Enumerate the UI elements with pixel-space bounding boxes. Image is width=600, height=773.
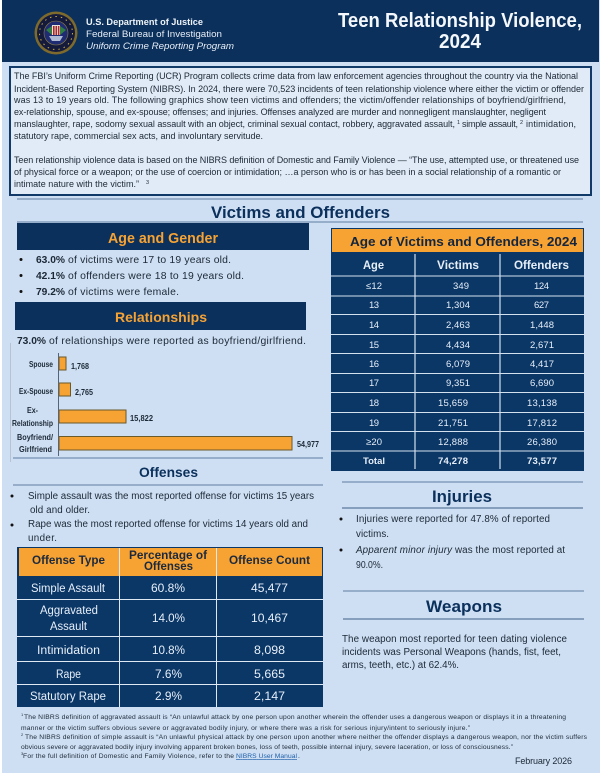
age table rows — [363, 281, 557, 467]
age table header: Offenders — [514, 258, 569, 272]
header band — [2, 0, 599, 62]
offense table rows: 10,467 — [251, 613, 288, 625]
age table rows: 9,351 — [446, 378, 470, 389]
age table rows: 19 — [369, 418, 379, 429]
age table rows: 12,888 — [438, 437, 468, 448]
weapons text — [342, 634, 568, 671]
age table rows: 18 — [369, 398, 379, 409]
offense table header: Percentage of — [129, 550, 207, 562]
footnotes — [21, 712, 588, 760]
offense table header: Offense Count — [229, 555, 310, 567]
age table rows: 15,659 — [438, 398, 468, 409]
bar chart: relationships: Ex-Spouse — [19, 387, 53, 396]
injuries bullets: 90.0%. — [356, 560, 383, 571]
bar chart: relationships: Spouse — [29, 360, 53, 369]
offense table rows: 8,098 — [254, 645, 285, 657]
footnotes: The NIBRS definition of aggravated assault is “An unlawful attack by one person upon another wherein the offender uses a dangerous weapon or displays it in a threatening — [24, 714, 566, 721]
injuries bullets — [340, 514, 565, 571]
age table rows: 21,751 — [438, 418, 468, 429]
offense table rows: 2.9% — [155, 691, 182, 703]
offense table rows: Rape — [56, 669, 81, 681]
intro text box: was 13 to 19 years old. The following graphics show teen victims and offenders; the victim/offender relationships of boyfriend/girlfriend, — [13, 95, 566, 105]
intro text box: 2 — [520, 120, 523, 126]
heading: Injuries: Injuries — [432, 487, 492, 506]
offense table header: Offense Type — [32, 555, 105, 567]
offense table rows: 2,147 — [254, 691, 285, 703]
weapons text: incidents was Personal Weapons (hands, fist, feet, — [342, 647, 561, 658]
injuries bullets: was the most reported at — [454, 545, 565, 556]
bar chart: relationships: Ex- — [27, 406, 38, 415]
age table rows: 4,434 — [446, 340, 470, 351]
intro text box: Teen relationship violence data is based on the NIBRS definition of Domestic and Family Violence — “The use, attempted use, or threatened use — [14, 155, 579, 165]
age table rows: 2,671 — [530, 340, 554, 351]
offense table rows: Intimidation — [37, 645, 100, 657]
intro text box — [10, 67, 591, 195]
offense table rows: 14.0% — [152, 613, 185, 625]
age table rows: 73,577 — [527, 456, 557, 467]
title — [338, 9, 582, 53]
footnotes: NIBRS User Manual — [236, 753, 298, 760]
offense table header: Offenses — [144, 561, 193, 573]
age table header: Victims — [437, 258, 479, 272]
offense table rows: Statutory Rape — [30, 691, 106, 703]
offense table rows: Assault — [50, 621, 88, 633]
age table rows: 74,278 — [438, 456, 468, 467]
age table rows: 15 — [369, 340, 379, 351]
age and gender bullets: 79.2% — [36, 287, 65, 298]
age table rows: 26,380 — [527, 437, 557, 448]
offense table rows: 7.6% — [155, 669, 182, 681]
footnotes: 1 — [21, 712, 24, 717]
intro text box: The FBI’s Uniform Crime Reporting (UCR) Program collects crime data from law enforcement agencies throughout the country via the National — [14, 71, 578, 81]
relationships statement: of relationships were reported as boyfriend/girlfriend. — [49, 336, 306, 347]
intro text box: 1 — [457, 120, 460, 126]
weapons text: arms, teeth, etc.) at 62.4%. — [342, 660, 459, 671]
age table rows: 2,463 — [446, 320, 470, 331]
age table rows: 4,417 — [530, 359, 554, 370]
offense table rows: 60.8% — [151, 583, 185, 595]
age table rows: 1,304 — [446, 300, 470, 311]
intro text box: ex-relationship, spouse, and ex-spouse; offenses; and injuries. Offenses analyzed are murder and nonnegligent manslaughter, negligent — [14, 107, 546, 117]
heading: Victims and Offenders: Victims and Offenders — [211, 203, 390, 222]
injuries bullets: Apparent minor injury — [355, 545, 453, 556]
offense table rows: 45,477 — [251, 583, 288, 595]
footnotes: 2 — [21, 732, 24, 737]
offense table rows: 5,665 — [254, 669, 285, 681]
panel: relationships heading — [15, 302, 306, 330]
injuries bullets: Injuries were reported for 47.8% of reported — [356, 514, 550, 525]
age table rows: 627 — [534, 300, 549, 311]
bar chart: relationships: Relationship — [12, 419, 53, 428]
publication date: February 2026 — [515, 756, 572, 766]
bar chart: relationships: Boyfriend/ — [17, 433, 54, 442]
offenses bullets: under. — [28, 533, 57, 544]
intro text box: Incident-Based Reporting System (NIBRS). In 2024, there were 70,523 incidents of teen relationship violence where either the victim or offender — [14, 84, 584, 94]
offenses bullets: old and older. — [30, 505, 90, 516]
age table rows: ≥20 — [366, 437, 382, 448]
bar chart: relationships — [10, 343, 319, 462]
bar chart: relationships: 1,768 — [71, 362, 89, 371]
age and gender bullets: 63.0% — [36, 255, 65, 266]
heading: Weapons: Weapons — [426, 597, 502, 616]
age and gender bullets: of victims were 17 to 19 years old. — [68, 255, 231, 266]
age table rows: 16 — [369, 359, 379, 370]
intro text box: 3 — [146, 180, 149, 186]
bar chart: relationships: 15,822 — [130, 414, 154, 423]
agency text: Federal Bureau of Investigation — [86, 29, 222, 40]
footnotes: The NIBRS definition of simple assault is “An unlawful physical attack by one person upon another where neither the offender displays a dangerous weapon, nor the victim suffers — [25, 734, 588, 741]
age table rows: 1,448 — [530, 320, 554, 331]
offense table rows: Aggravated — [40, 605, 98, 617]
table: age of victims and offenders — [331, 228, 584, 471]
age and gender bullets: 42.1% — [36, 271, 65, 282]
offenses bullets: Rape was the most reported offense for victims 14 years old and — [28, 519, 308, 530]
age table rows: 349 — [453, 281, 469, 292]
intro text box: simple assault, — [462, 119, 518, 129]
age table title: Age of Victims and Offenders, 2024 — [350, 234, 578, 249]
age and gender bullets: of victims were female. — [68, 287, 179, 298]
panel: relationships heading: Relationships — [115, 309, 207, 325]
offenses bullets — [10, 491, 314, 544]
icon: FBI seal — [34, 12, 78, 54]
agency text — [86, 17, 234, 52]
offense table rows: Simple Assault — [31, 583, 106, 595]
bar chart: relationships: Girlfriend — [19, 445, 52, 454]
age table rows: 13,138 — [527, 398, 557, 409]
footnotes: For the full definition of Domestic and Family Violence, refer to the — [23, 753, 234, 760]
bar chart: relationships: 54,977 — [297, 440, 319, 449]
intro text box: intimate nature with the victim.” — [14, 179, 139, 189]
footnotes: . — [298, 753, 300, 760]
footnotes: 3 — [21, 751, 24, 756]
age table rows: 6,690 — [530, 378, 554, 389]
heading: Offenses: Offenses — [139, 464, 198, 480]
age table rows: 13 — [369, 300, 379, 311]
age table header — [363, 258, 569, 272]
offense table rows — [30, 583, 288, 703]
offenses bullets: Simple assault was the most reported offense for victims 15 years — [28, 491, 314, 502]
bar chart: relationships: 2,765 — [75, 388, 93, 397]
age table rows: 124 — [534, 281, 549, 292]
age and gender bullets — [20, 255, 244, 298]
injuries bullets: victims. — [356, 529, 389, 540]
footnotes: manner or the victim suffers obvious severe or aggravated bodily injury, or where there was a risk for serious injury/intent to seriously injure.” — [21, 725, 470, 732]
intro text box: intimidation, — [526, 119, 576, 129]
agency text: Uniform Crime Reporting Program — [86, 41, 234, 52]
footnotes: obvious severe or aggravated bodily injury involving apparent broken bones, loss of teeth, possible internal injury, severe laceration, or loss of consciousness.” — [21, 744, 513, 751]
age and gender bullets: of offenders were 18 to 19 years old. — [68, 271, 244, 282]
age table rows: 17,812 — [527, 418, 557, 429]
table: offense types — [17, 547, 323, 707]
intro text box: manslaughter, rape, sodomy sexual assault with an object, criminal sexual contact, robbery, aggravated assault, — [14, 119, 455, 129]
age table rows: 6,079 — [446, 359, 470, 370]
offense table rows: 10.8% — [152, 645, 185, 657]
weapons text: The weapon most reported for teen dating violence — [342, 634, 568, 645]
offense table header — [32, 550, 310, 573]
intro text box: statutory rape, commercial sex acts, and involuntary servitude. — [14, 131, 263, 141]
age table rows: 14 — [369, 320, 379, 331]
age table rows: Total — [363, 456, 385, 467]
age table rows: 17 — [369, 378, 379, 389]
relationships statement: 73.0% — [17, 336, 46, 347]
intro text box: of physical force or a weapon; or the use of coercion or intimidation; …a person who is or has been in a social relationship of a romantic or — [14, 167, 561, 177]
panel: age and gender heading — [17, 223, 309, 250]
age table rows: ≤12 — [366, 281, 382, 292]
title: 2024 — [439, 30, 482, 53]
agency text: U.S. Department of Justice — [86, 17, 203, 28]
age table header: Age — [363, 258, 384, 272]
panel: age and gender heading: Age and Gender — [108, 231, 218, 247]
